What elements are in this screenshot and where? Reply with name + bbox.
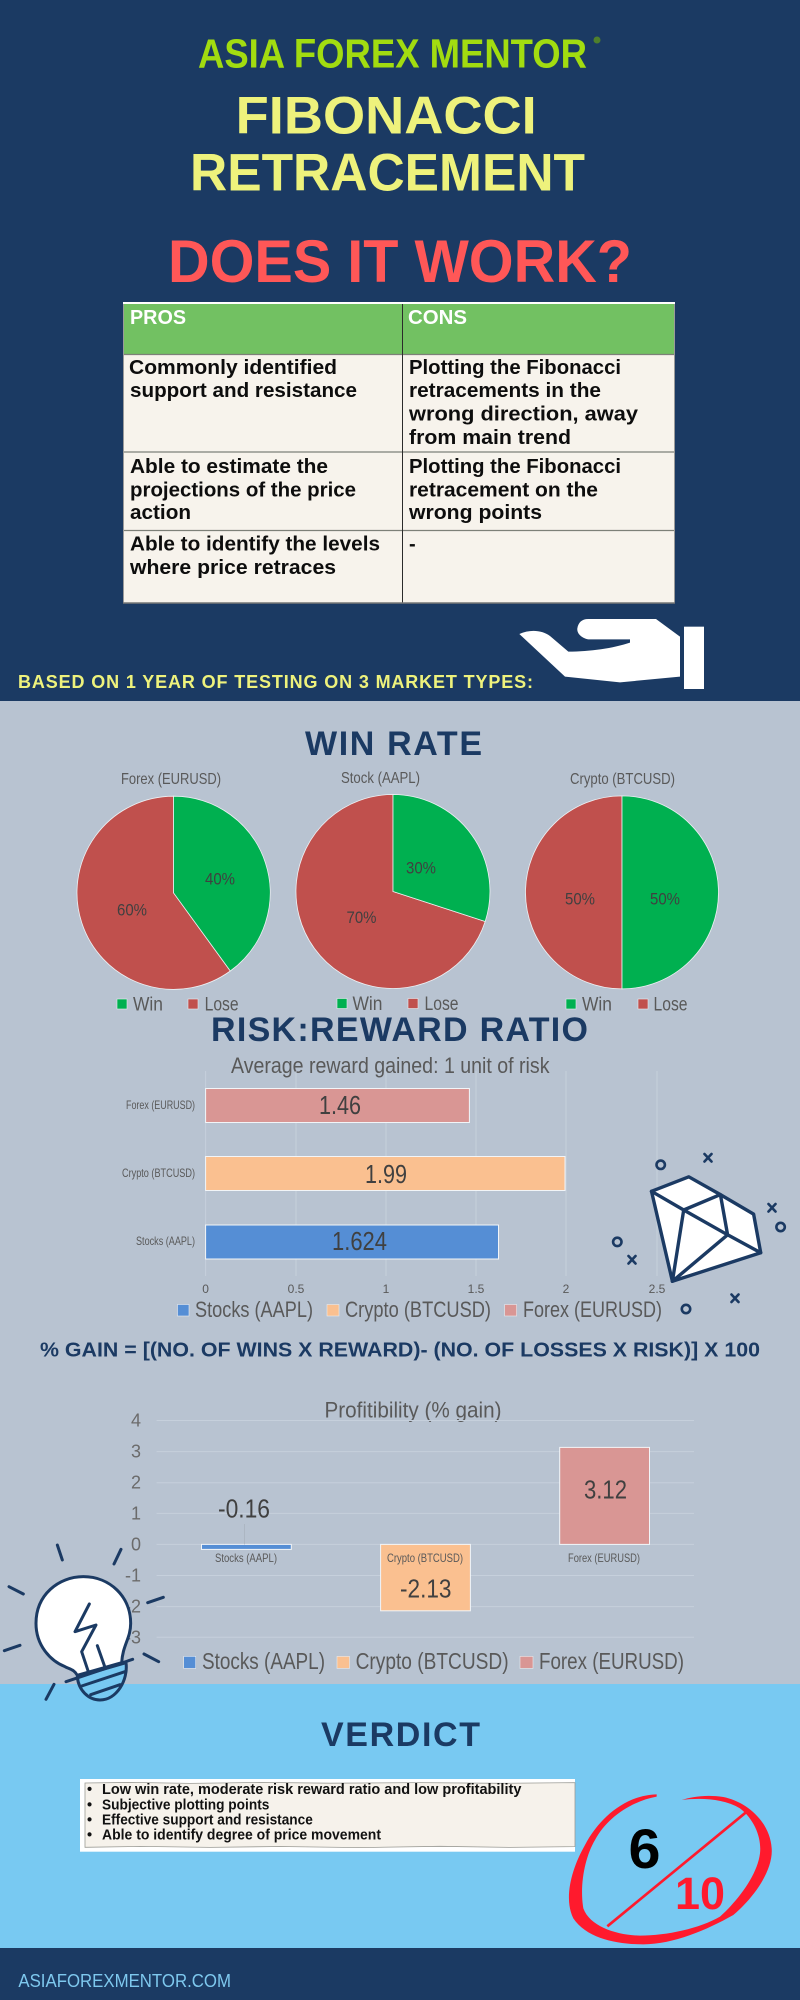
text box: verdict points: •	[87, 1812, 92, 1828]
pie chart: stock: 70%	[346, 908, 376, 927]
pie chart: crypto: 50%	[565, 889, 595, 908]
text: website: ASIAFOREXMENTOR.COM	[18, 1971, 231, 1991]
pie chart: stock: 30%	[406, 858, 436, 877]
legend: Stocks (AAPL)	[195, 1297, 313, 1322]
legend	[184, 1648, 684, 1674]
axis labels	[202, 1282, 666, 1296]
bar: forex profit	[560, 1447, 650, 1565]
pie chart: crypto: Lose	[654, 994, 688, 1016]
logo: Asia Forex Mentor: ASIA FOREX MENTOR	[198, 30, 587, 76]
row 1 text: Commonly identified	[129, 357, 337, 379]
bar: crypto	[206, 1156, 565, 1190]
legend	[178, 1297, 662, 1322]
pie chart: forex: 60%	[117, 901, 147, 920]
y axis labels: 0	[131, 1534, 141, 1554]
pie chart: crypto: Crypto (BTCUSD)	[570, 771, 675, 788]
row 2 text: retracement on the	[409, 480, 598, 502]
bar: forex profit: Forex (EURUSD)	[568, 1551, 640, 1565]
row 2 text	[130, 456, 621, 524]
legend: Crypto (BTCUSD)	[356, 1648, 509, 1674]
text box: verdict points: Subjective plotting points	[102, 1797, 269, 1813]
panel: footer	[0, 1948, 800, 2000]
pie chart: forex: 40%	[205, 870, 235, 888]
heading: verdict: VERDICT	[321, 1716, 480, 1754]
row 3 text: -	[409, 534, 416, 556]
legend: Stocks (AAPL)	[202, 1648, 325, 1674]
bar: crypto: 1.99	[365, 1159, 407, 1189]
bar: stocks	[206, 1225, 498, 1259]
icon: diamond	[613, 1154, 785, 1313]
panel: header	[0, 0, 800, 701]
category labels: Crypto (BTCUSD)	[122, 1166, 195, 1180]
bar: stocks: 1.624	[332, 1226, 387, 1256]
score: 6 out of 10: 10	[675, 1868, 725, 1919]
pie chart: forex: Win	[133, 994, 163, 1016]
axis labels: 2.5	[649, 1282, 666, 1296]
pie chart: forex: Lose	[205, 994, 239, 1016]
bar: forex profit: 3.12	[584, 1474, 627, 1504]
axis labels: 0.5	[288, 1282, 305, 1296]
row 2 text: action	[130, 502, 191, 524]
y axis labels: 3	[131, 1442, 141, 1462]
row 2 text: Able to estimate the	[130, 456, 328, 478]
row 1 text: Plotting the Fibonacci	[409, 357, 621, 379]
axis labels: 2	[563, 1282, 570, 1296]
row 3 text	[129, 534, 416, 579]
bar: crypto profit: Crypto (BTCUSD)	[387, 1551, 463, 1565]
y axis labels: 4	[131, 1410, 141, 1430]
bar: stocks profit: Stocks (AAPL)	[215, 1551, 277, 1565]
bar: crypto profit: -2.13	[400, 1574, 452, 1604]
axis labels: 0	[202, 1282, 209, 1296]
row 2 text: wrong points	[408, 502, 542, 524]
text box: verdict points	[80, 1779, 575, 1852]
pie chart: crypto	[526, 771, 718, 1016]
score: 6 out of 10	[569, 1794, 772, 1944]
legend: Forex (EURUSD)	[539, 1648, 684, 1674]
bar: crypto profit	[381, 1544, 470, 1611]
heading: does it work: DOES IT WORK?	[168, 228, 632, 295]
bar: forex	[206, 1088, 469, 1122]
text box: verdict points: •	[87, 1797, 92, 1813]
table header row: CONS	[408, 307, 467, 329]
panel: statistics	[0, 701, 800, 1684]
row 1 text	[129, 357, 639, 449]
y axis labels: 2	[131, 1472, 141, 1492]
y axis labels	[125, 1410, 141, 1648]
category labels: Forex (EURUSD)	[126, 1098, 195, 1112]
pie chart: stock: Lose	[424, 994, 458, 1015]
y axis labels: 1	[131, 1504, 141, 1524]
pie chart: forex: Forex (EURUSD)	[121, 771, 221, 788]
bar: stocks profit: -0.16	[218, 1494, 270, 1524]
text box: verdict points: Able to identify degree of price movement	[102, 1827, 381, 1843]
heading: risk reward ratio: RISK:REWARD RATIO	[211, 1011, 588, 1049]
title: Fibonacci: FIBONACCI	[236, 86, 537, 145]
row 2 text: projections of the price	[130, 480, 356, 502]
row 1 text: support and resistance	[130, 380, 357, 402]
title: Retracement: RETRACEMENT	[190, 144, 585, 203]
category labels: Stocks (AAPL)	[136, 1234, 195, 1248]
y axis labels: -1	[125, 1566, 141, 1586]
bar chart: risk reward: Average reward gained: 1 unit of risk	[231, 1053, 550, 1078]
text box: verdict points: •	[87, 1827, 92, 1843]
row 2 text: Plotting the Fibonacci	[409, 456, 621, 478]
pie chart: forex	[77, 771, 270, 1016]
row 3 text: where price retraces	[129, 557, 336, 579]
table header row	[124, 304, 674, 354]
row 1 text: wrong direction, away	[408, 404, 639, 426]
icon: hand	[519, 619, 704, 689]
table header row: PROS	[130, 307, 186, 329]
bar chart: profitability	[125, 1398, 694, 1674]
text: based on testing: BASED ON 1 YEAR OF TESTING ON 3 MARKET TYPES:	[18, 672, 533, 692]
bar chart: risk reward	[122, 1053, 666, 1322]
bar: forex: 1.46	[319, 1090, 361, 1120]
legend: Forex (EURUSD)	[523, 1297, 662, 1322]
formula: percent gain: % GAIN = [(NO. OF WINS X REWARD)- (NO. OF LOSSES X RISK)] X 100	[40, 1340, 760, 1362]
row 3 text: Able to identify the levels	[130, 534, 380, 556]
y axis labels: -2	[125, 1596, 141, 1616]
row 1 text: retracements in the	[409, 380, 601, 402]
legend: Crypto (BTCUSD)	[345, 1297, 491, 1322]
text box: verdict points: •	[87, 1782, 92, 1798]
pie chart: crypto: 50%	[650, 889, 680, 908]
bar: stocks profit	[202, 1494, 291, 1565]
panel: verdict	[0, 1684, 800, 1948]
pie chart: crypto: Win	[582, 994, 612, 1016]
table: pros and cons	[123, 302, 675, 604]
bar chart: profitability: Profitibility (% gain)	[324, 1398, 502, 1423]
row 1 text: from main trend	[409, 427, 571, 449]
icon: light bulb	[4, 1545, 163, 1700]
y axis labels: -3	[125, 1628, 141, 1648]
pie chart: stock: Stock (AAPL)	[341, 770, 420, 787]
axis labels: 1	[383, 1282, 390, 1296]
score: 6 out of 10: 6	[628, 1817, 660, 1880]
axis labels: 1.5	[468, 1282, 485, 1296]
text box: verdict points: Effective support and resistance	[102, 1812, 313, 1828]
pie chart: stock: Win	[352, 994, 382, 1015]
heading: win rate: WIN RATE	[305, 725, 482, 763]
text box: verdict points: Low win rate, moderate risk reward ratio and low profitability	[102, 1782, 521, 1798]
category labels	[122, 1098, 195, 1248]
pie chart: stock	[296, 770, 490, 1015]
